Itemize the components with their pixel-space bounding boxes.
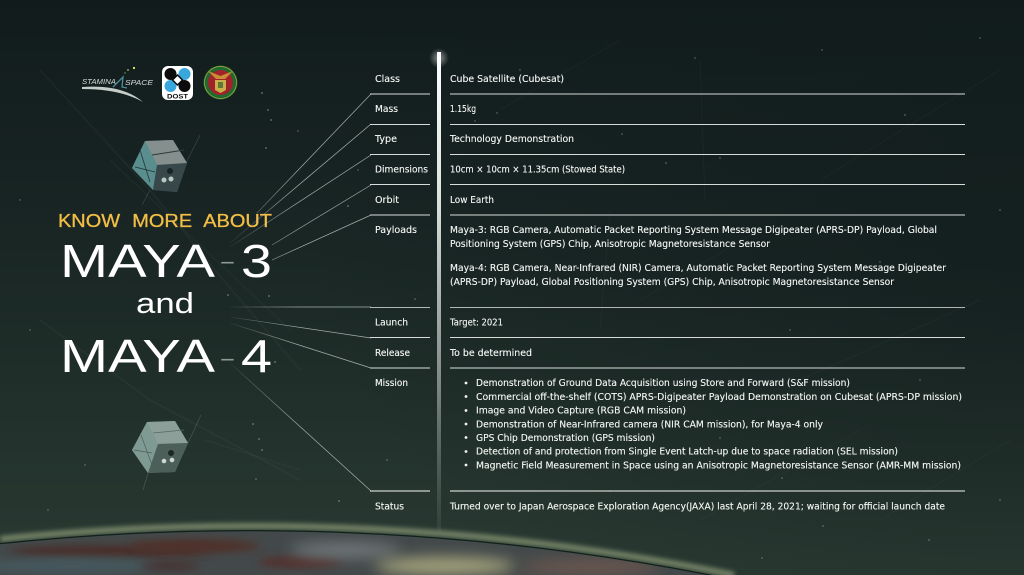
row: mission: Demonstration of Near-Infrared camera (NIR CAM mission), for Maya-4 only (476, 420, 823, 430)
logo: DOST (162, 66, 193, 100)
row: payloads: Positioning System (GPS) Chip, Anisotropic Magnetoresistance Sensor (450, 239, 770, 250)
row: class: Cube Satellite (Cubesat) (450, 74, 564, 85)
title: Maya-4: - (219, 348, 236, 370)
row: launch: Target: 2021 (449, 318, 503, 328)
row: class (375, 74, 564, 85)
title: Maya-3 (60, 235, 272, 287)
row: release (375, 348, 532, 359)
title: Maya-4 (60, 330, 272, 382)
row: payloads: (APRS-DP) Payload, Global Positioning System (GPS) Chip, Anisotropic Magnetoresistance Sensor (450, 277, 894, 288)
row: release: Release (375, 348, 410, 359)
row: mission: Commercial off-the-shelf (COTS) APRS-Digipeater Payload Demonstration on Cubesat (APRS-DP mission) (476, 392, 962, 403)
row: orbit: Orbit (375, 195, 399, 206)
row: type: Type (374, 134, 397, 145)
row: release: To be determined (449, 348, 532, 359)
row: dimensions: 10cm × 10cm × 11.35cm (Stowed State) (450, 164, 625, 176)
row: status: Turned over to Japan Aerospace Exploration Agency(JAXA) last April 28, 2021; waiting for official launch date (449, 502, 945, 512)
row: payloads (375, 225, 946, 288)
leader lines (230, 94, 371, 491)
title: Maya-4: MAYA (60, 330, 215, 382)
row: class: Class (375, 74, 400, 85)
row: mass: 1.15kg (450, 104, 476, 115)
row: mission: Mission (375, 378, 408, 389)
row: mission: GPS Chip Demonstration (GPS mission) (476, 433, 655, 444)
table rules (370, 94, 965, 491)
logo: Stamina4Space: SPACE (125, 80, 153, 87)
row: launch: Launch (375, 318, 408, 328)
title: Maya-3: MAYA (60, 235, 215, 287)
earth horizon (0, 525, 734, 575)
logo: Stamina4Space (82, 67, 153, 102)
row: launch (375, 318, 503, 328)
row: mass: Mass (375, 104, 398, 115)
row: mission: Detection of and protection from Single Event Latch-up due to space radiation (SEL mission) (476, 446, 898, 458)
row: dimensions (375, 164, 625, 176)
row: type: Technology Demonstration (449, 134, 574, 145)
title: and: and (136, 288, 194, 320)
satellite: Maya-3 (132, 135, 200, 205)
row: status: Status (375, 502, 404, 512)
logo: university seal (204, 66, 238, 100)
row: payloads: Payloads (375, 225, 417, 236)
row: mass (375, 104, 476, 115)
row: payloads: Maya-4: RGB Camera, Near-Infrared (NIR) Camera, Automatic Packet Reporting System Message Digipeater (450, 263, 946, 274)
title: Maya-3: - (219, 251, 236, 273)
center light beam (429, 48, 449, 532)
row: mission: Demonstration of Ground Data Acquisition using Store and Forward (S&F mission) (476, 378, 850, 389)
row: type (374, 134, 574, 145)
row: mission: Image and Video Capture (RGB CAM mission) (476, 406, 686, 416)
satellite: Maya-4 (132, 415, 201, 490)
logo: DOST: DOST (167, 94, 188, 100)
heading: know more about: KNOW MORE ABOUT (58, 211, 272, 231)
row: mission: Magnetic Field Measurement in Space using an Anisotropic Magnetoresistance Sensor (AMR-MM mission) (476, 460, 961, 472)
row: dimensions: Dimensions (375, 164, 428, 176)
row: mission (375, 378, 962, 472)
title: Maya-4: 4 (241, 330, 272, 382)
row: orbit (375, 195, 494, 206)
logos (82, 66, 238, 102)
row: payloads: Maya-3: RGB Camera, Automatic Packet Reporting System Message Digipeater (APRS-DP) Payload, Global (450, 225, 937, 236)
row: orbit: Low Earth (450, 195, 494, 206)
logo: Stamina4Space: STAMINA (82, 79, 116, 86)
title: Maya-3: 3 (241, 235, 272, 287)
